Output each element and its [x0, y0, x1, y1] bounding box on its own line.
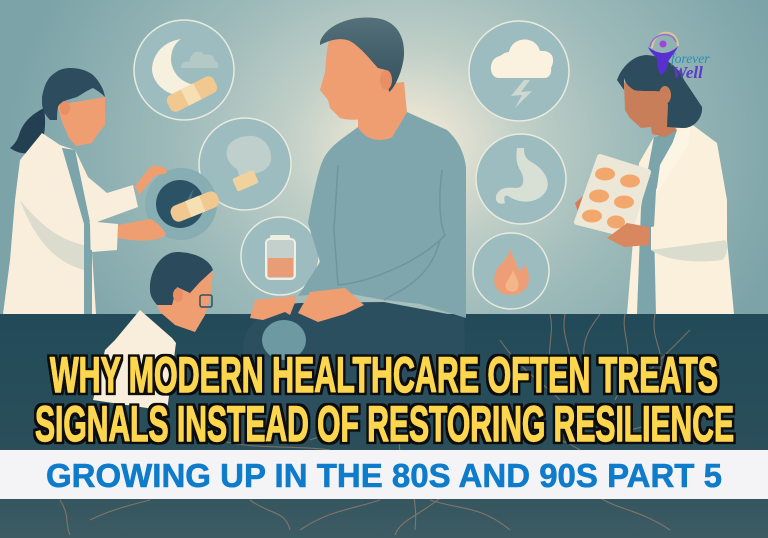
bandaged wound dish [145, 168, 221, 240]
forever well logo [648, 33, 710, 82]
left doctor [3, 68, 167, 314]
subtitle band [0, 450, 768, 499]
subtitle band: GROWING UP IN THE 80S AND 90S PART 5 [46, 457, 722, 494]
battery badge [241, 217, 319, 295]
stomach badge [476, 134, 566, 224]
forever well logo: forever [671, 51, 710, 66]
flame badge [473, 233, 549, 309]
brain badge [199, 118, 291, 210]
central man [243, 18, 466, 420]
moon badge [134, 20, 234, 120]
forever well logo: Well [672, 63, 703, 82]
roots network [60, 314, 700, 535]
child [93, 252, 306, 411]
right doctor [575, 55, 734, 314]
floor [0, 314, 768, 538]
wall background [0, 0, 768, 315]
title [35, 347, 734, 452]
storm cloud badge [469, 21, 569, 121]
